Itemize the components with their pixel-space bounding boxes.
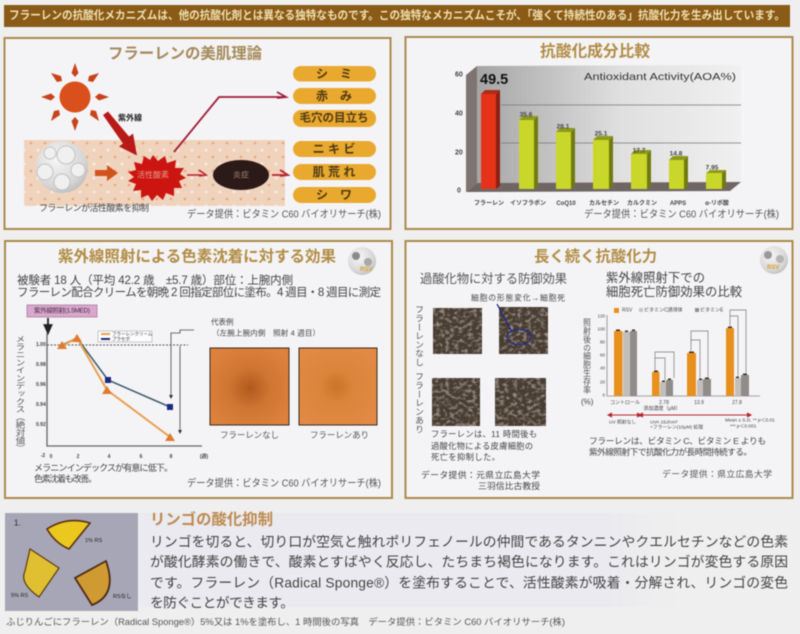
caption: fullerene suppresses active oxygen: フラーレンが活性酸素を抑制 <box>39 202 149 213</box>
category labels: α-リポ酸 <box>705 199 729 207</box>
icon: RSV badge: RSV <box>767 265 779 271</box>
study description <box>17 273 382 299</box>
chart conclusion: フラーレンは、ビタミン C、ビタミン E よりも <box>589 436 766 446</box>
heading: apple oxidation suppression: リンゴの酸化抑制 <box>150 510 273 528</box>
data credit: left: 三羽信比古教授 <box>478 480 540 491</box>
conclusion text: メラニンインデックスが有意に低下。 <box>34 462 173 473</box>
arrow: inflammation to symptoms <box>272 170 288 176</box>
tag: UV irradiation: 紫外線照射(1.5MED) <box>34 306 90 314</box>
group labels: 2.78 <box>659 400 669 406</box>
caption: representative example: 代表例 <box>211 316 234 326</box>
conclusion text <box>34 462 173 484</box>
y axis labels: 20 <box>600 380 605 384</box>
3D bar chart: 0 <box>457 188 461 194</box>
symptom pills: ニ キ ビ <box>313 141 355 156</box>
y axis labels: 0.96 <box>36 382 46 388</box>
micrograph caption: フラーレンは、11 時間後も <box>431 429 537 439</box>
annotation: cell morphology: 細胞の形態変化→細胞死 <box>471 292 565 302</box>
y axis labels: 120 <box>597 314 605 318</box>
y axis unit: (%) <box>581 398 594 406</box>
legend: プラセボ <box>112 336 130 342</box>
y axis labels: 1.00 <box>36 342 46 348</box>
symptom pills: 赤 み <box>316 89 352 103</box>
data credit: left <box>421 469 540 491</box>
micrograph caption <box>431 429 537 462</box>
arrow: UV into skin <box>103 112 137 156</box>
subheading: cell death comparison <box>606 270 742 299</box>
symptom pills: 毛穴の目立ち <box>300 110 368 124</box>
bar: fullerene <box>481 90 500 189</box>
group labels: 27.8 <box>732 400 742 406</box>
icon: RSV badge <box>760 246 788 274</box>
chart conclusion: 紫外線照射下で抗酸化力が長時間持続する。 <box>589 446 752 457</box>
y axis labels: 80 <box>600 340 605 344</box>
value labels: 35.6 <box>520 112 533 118</box>
value labels: 7.95 <box>706 164 719 172</box>
photo: apple slices: 1. <box>14 518 21 528</box>
subheading: protection against peroxide: 過酸化物に対する防御効果 <box>420 271 567 286</box>
y axis title: 照射後の細胞生存率 <box>582 318 592 395</box>
3D bar chart: 20 <box>455 150 463 156</box>
y axis labels: 0.92 <box>36 422 46 428</box>
data credit: left: データ提供：元県立広島大学 <box>421 469 540 480</box>
y axis labels: 40 <box>600 366 605 370</box>
series: fullerene <box>57 334 175 441</box>
value labels: 17.7 <box>633 148 646 154</box>
significance brackets <box>169 330 194 434</box>
legend: RSV <box>622 308 633 314</box>
caption: representative example: （左腕上腕内側 照射 4 週目） <box>212 328 320 338</box>
y axis labels: 0.98 <box>36 362 46 368</box>
heading: long-lasting antioxidant power: 長く続く抗酸化力 <box>534 248 657 266</box>
arrows: UV range <box>608 413 751 417</box>
photo: apple slices: 5% RS <box>11 593 28 599</box>
legend <box>614 306 724 314</box>
x axis labels: 0 <box>50 454 53 460</box>
heading: UV pigmentation effect: 紫外線照射による色素沈着に対する効果 <box>58 246 336 266</box>
y axis labels: 100 <box>597 326 605 332</box>
callout: damaged cell circle <box>497 304 531 344</box>
arrow: fullerene to radicals <box>95 165 118 181</box>
footnotes: Mean ± S.D. ** p＜0.01 <box>725 418 775 424</box>
3D bar chart: 60 <box>455 72 463 78</box>
photo: with fullerene: フラーレンあり <box>310 430 369 440</box>
category labels: フラーレン <box>474 200 504 207</box>
row label: with fullerene: フラーレンあり <box>414 372 424 434</box>
body text: リンゴを切ると、切り口が空気と触れポリフェノールの仲間であるタンニンやクエルセチンなどの色素 <box>150 534 788 550</box>
ellipse: inflammation <box>213 160 269 190</box>
micrograph photos <box>432 307 548 426</box>
micrograph caption: 死亡を抑制した。 <box>431 452 500 462</box>
arrow: radicals up to upper symptoms <box>174 92 286 152</box>
footnotes: UV 照射なし <box>609 418 636 426</box>
panel: antioxidant comparison <box>406 37 792 229</box>
study description: 被験者 18 人（平均 42.2 歳 ±5.7 歳）部位：上腕内側 <box>17 273 293 287</box>
panel: UV pigmentation effect <box>5 241 392 498</box>
tag: UV irradiation <box>27 305 97 317</box>
starburst: active oxygen: 活性酸素 <box>137 170 169 180</box>
photo: with fullerene <box>299 348 377 440</box>
footnotes: UVA 15J/cm² <box>650 420 678 426</box>
study description: フラーレン配合クリームを朝晩 2 回指定部位に塗布。4 週目・8 週目に測定 <box>17 285 382 299</box>
x axis labels: -2 <box>41 453 45 459</box>
group labels: 添加濃度（μM） <box>643 405 681 412</box>
category labels <box>474 199 729 207</box>
group labels: コントロール <box>610 400 640 406</box>
symptom pills: シ ワ <box>316 188 352 202</box>
bars: other antioxidants <box>519 116 726 189</box>
photo: apple slices <box>5 513 138 611</box>
panel: beauty skin theory <box>4 38 390 229</box>
category labels: カルクミン <box>627 199 657 207</box>
arrow: irradiation point <box>44 318 52 333</box>
significance brackets <box>655 310 746 380</box>
legend <box>98 331 153 342</box>
subheading: cell death comparison: 細胞死亡防御効果の比較 <box>606 284 742 299</box>
x axis labels: 6 <box>140 454 143 460</box>
footnotes <box>609 418 775 430</box>
y axis labels <box>597 314 605 398</box>
error bar caps <box>616 326 747 382</box>
bars: vitamin E <box>630 331 749 396</box>
value labels: 14.8 <box>670 150 683 158</box>
row label: without fullerene: フラーレンなし <box>414 305 424 367</box>
section: apple oxidation <box>5 510 788 627</box>
photo: without fullerene <box>210 348 289 440</box>
group labels <box>610 400 742 412</box>
y axis title: メラニンインデックス（絶対値） <box>14 335 25 452</box>
3D bar chart: 40 <box>455 110 463 118</box>
symptom pills <box>293 66 376 203</box>
line chart: melanin index <box>14 305 208 460</box>
x axis labels: (週) <box>200 453 208 460</box>
symptom pills: 肌 荒 れ <box>313 164 355 179</box>
body text: です。フラーレン（Radical Sponge®）を塗布することで、活性酸素が吸着・分解され、リンゴの変色 <box>150 574 788 590</box>
micrograph caption: 過酸化物による皮膚細胞の <box>431 441 533 451</box>
subheading: cell death comparison: 紫外線照射下での <box>606 270 705 285</box>
x axis labels: 8 <box>170 454 173 460</box>
body text: が酸化酵素の働きで、酸素とすばやく反応し、たちまち褐色になります。これはリンゴが変色する原因 <box>150 554 788 570</box>
3D bar chart <box>455 65 741 207</box>
icon: sun <box>41 63 109 131</box>
y axis labels: 0 <box>602 392 605 398</box>
y axis labels: 0.94 <box>36 402 46 408</box>
value labels <box>480 72 719 172</box>
annotation: chart subtitle: Antioxidant Activity(AOA%) <box>584 71 736 83</box>
conclusion text: 色素沈着も改善。 <box>34 473 97 484</box>
category labels: CoQ10 <box>556 201 576 207</box>
icon: fullerene ball <box>36 141 88 193</box>
photo: without fullerene: フラーレンなし <box>220 430 279 440</box>
caption: representative example <box>211 316 320 338</box>
category labels: カルセチン <box>589 199 619 207</box>
label: UV rays: 紫外線 <box>118 112 142 122</box>
data credit: データ提供：ビタミン C60 バイオリサーチ(株) <box>187 476 381 490</box>
icon: RSV badge: RSV <box>360 267 372 273</box>
group labels: 13.9 <box>694 400 704 406</box>
data credit: データ提供：ビタミン C60 バイオリサーチ(株) <box>584 208 779 220</box>
panel: long-lasting antioxidant power <box>406 241 792 498</box>
ellipse: inflammation: 炎症 <box>233 170 249 180</box>
data credit: right: データ提供：県立広島大学 <box>662 468 772 479</box>
heading: beauty skin theory: フラーレンの美肌理論 <box>108 44 263 62</box>
symptom pills: シ ミ <box>316 67 352 81</box>
category labels: APPS <box>670 201 686 207</box>
value labels: 49.5 <box>480 72 508 88</box>
skin layer <box>24 140 285 206</box>
bars: orange fullerene <box>614 328 734 396</box>
x axis labels: 2 <box>77 454 80 460</box>
photo: apple slices: 1% RS <box>85 538 102 544</box>
value labels: 28.1 <box>557 124 570 130</box>
footnotes: *** p＜0.001 <box>730 424 757 430</box>
series: placebo <box>62 338 173 410</box>
x axis labels: 4 <box>108 454 111 460</box>
legend: フラーレンクリーム <box>112 332 153 338</box>
footnotes: +フラーレン(10μM) 処理 <box>650 424 703 430</box>
body text <box>150 534 788 610</box>
photo caption and credit: ふじりんごにフラーレン（Radical Sponge®）5%又は 1%を塗布し、1 時間後の写真 データ提供：ビタミン C60 バイオリサーチ(株) <box>6 616 565 627</box>
bars: vitamin C <box>623 332 741 396</box>
photo: apple slices: RSなし <box>113 593 132 600</box>
heading: antioxidant comparison: 抗酸化成分比較 <box>540 42 650 60</box>
top banner <box>4 5 790 27</box>
value labels: 25.1 <box>595 130 608 138</box>
bar chart: cell survival <box>581 306 775 430</box>
category labels: イソフラボン <box>510 199 546 207</box>
y axis labels <box>36 342 46 428</box>
arrow: radicals to inflammation <box>187 170 206 176</box>
icon: RSV badge <box>348 247 376 275</box>
legend: ビタミンE <box>700 306 724 314</box>
starburst: active oxygen <box>128 155 186 201</box>
x axis labels <box>41 453 208 460</box>
y axis labels: 60 <box>600 352 605 358</box>
data credit: データ提供：ビタミン C60 バイオリサーチ(株) <box>187 208 381 220</box>
body text: を防ぐことができます。 <box>150 596 294 610</box>
legend: ビタミンC誘導体 <box>644 306 683 314</box>
chart conclusion <box>589 436 766 457</box>
